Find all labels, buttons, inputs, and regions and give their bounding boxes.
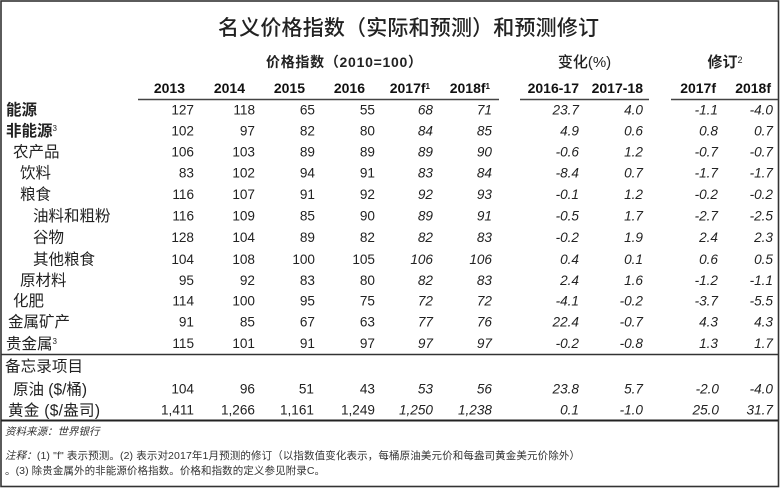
row: non-energy: 85 bbox=[477, 124, 492, 138]
row: crude oil: 原油 ($/桶) bbox=[13, 380, 87, 398]
row: gold: 0.1 bbox=[560, 402, 579, 418]
row: grains: 1.9 bbox=[624, 230, 643, 245]
row: food: 107 bbox=[232, 187, 255, 202]
row: metals and minerals: 金属矿产 bbox=[8, 313, 70, 331]
row: raw materials: 83 bbox=[477, 273, 492, 288]
row: precious metals: 1.7 bbox=[754, 336, 773, 351]
row: energy: 68 bbox=[418, 102, 433, 118]
row: oils and meals: -2.7 bbox=[695, 208, 718, 224]
row: non-energy: 82 bbox=[300, 124, 315, 138]
row: energy: -1.1 bbox=[695, 102, 718, 118]
row: other food: 106 bbox=[469, 252, 492, 267]
row: crude oil: 53 bbox=[418, 382, 433, 396]
row: other food: 104 bbox=[171, 252, 194, 267]
column headers: 2017f bbox=[680, 80, 716, 96]
memo divider bbox=[1, 354, 778, 356]
row: food: 116 bbox=[172, 187, 194, 202]
row: fertilizers: -4.1 bbox=[556, 294, 579, 308]
row: grains: 83 bbox=[477, 230, 492, 245]
row: oils and meals bbox=[33, 207, 773, 225]
row: food: 92 bbox=[418, 187, 433, 202]
row: metals and minerals: 67 bbox=[300, 314, 315, 330]
row: raw materials: 80 bbox=[360, 273, 375, 288]
row: beverages: 83 bbox=[418, 166, 433, 180]
row: raw materials bbox=[20, 272, 773, 290]
row: metals and minerals: 76 bbox=[477, 314, 492, 330]
row: fertilizers: 化肥 bbox=[13, 292, 44, 310]
row: metals and minerals: 91 bbox=[179, 314, 194, 330]
row: metals and minerals: 85 bbox=[240, 314, 255, 330]
row: precious metals: 1.3 bbox=[699, 336, 718, 351]
row: beverages: 84 bbox=[477, 166, 492, 180]
row: non-energy: 80 bbox=[360, 124, 375, 138]
row: oils and meals: 85 bbox=[300, 208, 315, 224]
row: energy: 118 bbox=[233, 102, 255, 118]
row: other food: 106 bbox=[410, 252, 433, 267]
row: food: 93 bbox=[477, 187, 492, 202]
row: gold: 1,250 bbox=[399, 402, 433, 418]
notes: 注释：(1) "f" 表示预测。(2) 表示对2017年1月预测的修订（以指数值变化表示，每桶原油美元价和每盎司黄金美元价除外） bbox=[5, 449, 580, 462]
row: oils and meals: 91 bbox=[477, 208, 492, 224]
header group: revisions: 2 bbox=[738, 55, 743, 65]
row: agriculture: -0.7 bbox=[695, 144, 718, 160]
row: other food: 100 bbox=[292, 252, 315, 267]
row: beverages: -8.4 bbox=[556, 166, 579, 180]
row: precious metals: 97 bbox=[360, 336, 375, 351]
row: other food: 0.6 bbox=[699, 252, 718, 267]
row: grains: 89 bbox=[300, 230, 315, 245]
row: non-energy: 0.7 bbox=[754, 124, 773, 138]
row: gold: 1,411 bbox=[161, 402, 194, 418]
row: grains bbox=[33, 228, 773, 246]
row: oils and meals: 89 bbox=[418, 208, 433, 224]
row: fertilizers: 95 bbox=[300, 294, 315, 308]
column headers: 2016 bbox=[334, 80, 365, 96]
row: non-energy: 97 bbox=[240, 124, 255, 138]
column headers: 2017-18 bbox=[592, 80, 643, 96]
row: crude oil: 51 bbox=[299, 382, 314, 396]
row: crude oil: 5.7 bbox=[624, 382, 643, 396]
row: non-energy: 0.6 bbox=[624, 124, 643, 138]
row: raw materials: 2.4 bbox=[559, 273, 579, 288]
row: gold: 31.7 bbox=[747, 402, 773, 418]
row: fertilizers: 75 bbox=[360, 294, 375, 308]
row: other food: 0.4 bbox=[560, 252, 579, 267]
row: raw materials: 82 bbox=[418, 273, 433, 288]
row: grains: 82 bbox=[360, 230, 375, 245]
row: gold: 1,266 bbox=[221, 402, 255, 418]
row: other food: 0.5 bbox=[754, 252, 773, 267]
row: other food bbox=[33, 250, 773, 268]
row: oils and meals: 116 bbox=[172, 208, 194, 224]
row: metals and minerals: 77 bbox=[418, 314, 433, 330]
row: energy: 127 bbox=[171, 102, 194, 118]
row: metals and minerals: -0.7 bbox=[620, 314, 643, 330]
bottom rule bbox=[1, 420, 778, 422]
row: agriculture bbox=[13, 143, 773, 161]
row: crude oil: 43 bbox=[360, 382, 375, 396]
row: food: -0.1 bbox=[556, 187, 579, 202]
row: precious metals: -0.2 bbox=[556, 336, 579, 351]
row: fertilizers: 72 bbox=[418, 294, 433, 308]
column headers: 2018f bbox=[735, 80, 771, 96]
header group: price index: 价格指数（2010=100） bbox=[266, 54, 422, 70]
row: agriculture: 89 bbox=[360, 144, 375, 160]
row: food: -0.2 bbox=[750, 187, 773, 202]
notes: 。(3) 除贵金属外的非能源价格指数。价格和指数的定义参见附录C。 bbox=[5, 464, 325, 477]
row: grains: 104 bbox=[232, 230, 255, 245]
row: energy: 4.0 bbox=[624, 102, 643, 118]
row: raw materials: 原材料 bbox=[20, 272, 67, 290]
row: oils and meals: 90 bbox=[360, 208, 375, 224]
row: crude oil: 23.8 bbox=[552, 382, 579, 396]
row: raw materials: 95 bbox=[179, 273, 194, 288]
row: metals and minerals: 22.4 bbox=[552, 314, 579, 330]
row: other food: 0.1 bbox=[624, 252, 643, 267]
row: crude oil: 104 bbox=[171, 382, 194, 396]
row: other food: 108 bbox=[232, 252, 255, 267]
row: grains: 82 bbox=[418, 230, 433, 245]
row: agriculture: 103 bbox=[232, 144, 255, 160]
row: oils and meals: 油料和粗粉 bbox=[33, 207, 111, 225]
row: crude oil: 56 bbox=[477, 382, 492, 396]
row: gold bbox=[8, 402, 773, 420]
row: energy bbox=[6, 100, 773, 119]
row: precious metals: 91 bbox=[300, 336, 315, 351]
row: other food: 其他粮食 bbox=[33, 250, 96, 268]
row: non-energy: 102 bbox=[171, 124, 194, 138]
row: beverages: 102 bbox=[232, 166, 255, 180]
row: precious metals: 3 bbox=[53, 337, 58, 346]
row: agriculture: 90 bbox=[477, 144, 492, 160]
row: grains: -0.2 bbox=[556, 230, 579, 245]
row: fertilizers: -5.5 bbox=[750, 294, 773, 308]
row: food: 92 bbox=[360, 187, 375, 202]
row: energy: 23.7 bbox=[552, 102, 579, 118]
row: raw materials: 83 bbox=[300, 273, 315, 288]
column headers bbox=[154, 80, 771, 96]
row: food: 91 bbox=[300, 187, 315, 202]
row: precious metals: 97 bbox=[418, 336, 433, 351]
row: beverages: 94 bbox=[300, 166, 315, 180]
row: food bbox=[20, 186, 773, 204]
title: 名义价格指数（实际和预测）和预测修订 bbox=[218, 17, 599, 40]
memo heading: 备忘录项目 bbox=[5, 358, 83, 376]
row: food: 粮食 bbox=[20, 186, 52, 204]
row: non-energy: 4.9 bbox=[560, 124, 579, 138]
row: oils and meals: -2.5 bbox=[750, 208, 773, 224]
header group: change: 变化(%) bbox=[558, 53, 611, 71]
row: gold: 1,249 bbox=[341, 402, 375, 418]
row: precious metals: 115 bbox=[172, 336, 194, 351]
row: agriculture: 89 bbox=[300, 144, 315, 160]
column headers: 2017f bbox=[390, 80, 426, 96]
row: food: 1.2 bbox=[624, 187, 643, 202]
column headers: 2015 bbox=[274, 80, 305, 96]
row: raw materials: 1.6 bbox=[624, 273, 643, 288]
row: grains: 2.3 bbox=[753, 230, 773, 245]
row: precious metals bbox=[6, 335, 773, 353]
row: metals and minerals: 4.3 bbox=[754, 314, 773, 330]
row: metals and minerals: 63 bbox=[360, 314, 375, 330]
row: grains: 谷物 bbox=[33, 228, 64, 246]
column headers: 1 bbox=[486, 82, 491, 91]
row: beverages: -1.7 bbox=[750, 166, 773, 180]
row: gold: 1,238 bbox=[458, 402, 492, 418]
row: gold: 25.0 bbox=[692, 402, 719, 418]
row: energy: 65 bbox=[300, 102, 315, 118]
column headers: 2016-17 bbox=[528, 80, 579, 96]
row: energy: 71 bbox=[477, 102, 492, 118]
row: metals and minerals: 4.3 bbox=[699, 314, 718, 330]
row: fertilizers: 100 bbox=[232, 294, 255, 308]
row: fertilizers: -3.7 bbox=[695, 294, 718, 308]
row: agriculture: 农产品 bbox=[13, 143, 60, 161]
row: agriculture: 1.2 bbox=[624, 144, 643, 160]
row: precious metals: 101 bbox=[232, 336, 255, 351]
row: agriculture: 89 bbox=[418, 144, 433, 160]
row: oils and meals: 109 bbox=[232, 208, 255, 224]
row: fertilizers: -0.2 bbox=[620, 294, 643, 308]
row: energy: -4.0 bbox=[750, 102, 773, 118]
row: beverages: 91 bbox=[360, 166, 375, 180]
row: fertilizers bbox=[13, 292, 773, 310]
row: raw materials: -1.2 bbox=[695, 273, 718, 288]
header group: revisions: 修订 bbox=[707, 54, 738, 71]
row: food: -0.2 bbox=[695, 187, 718, 202]
row: grains: 2.4 bbox=[698, 230, 718, 245]
row: energy: 55 bbox=[360, 102, 375, 118]
row: other food: 105 bbox=[352, 252, 375, 267]
column headers: 1 bbox=[426, 82, 431, 91]
header rules bbox=[138, 98, 778, 100]
row: non-energy: 3 bbox=[53, 124, 58, 133]
column headers: 2013 bbox=[154, 80, 185, 96]
row: crude oil: 96 bbox=[240, 382, 255, 396]
row: gold: 1,161 bbox=[280, 402, 314, 418]
row: non-energy bbox=[6, 121, 773, 140]
row: agriculture: 106 bbox=[171, 144, 194, 160]
row: raw materials: 92 bbox=[240, 273, 255, 288]
row: energy: 能源 bbox=[6, 100, 38, 119]
row: fertilizers: 72 bbox=[477, 294, 492, 308]
row: oils and meals: -0.5 bbox=[556, 208, 579, 224]
row: fertilizers: 114 bbox=[172, 294, 194, 308]
row: beverages: 83 bbox=[179, 166, 194, 180]
row: non-energy: 0.8 bbox=[699, 124, 718, 138]
row: agriculture: -0.6 bbox=[556, 144, 579, 160]
row: gold: 黄金 ($/盎司) bbox=[8, 402, 100, 420]
row: precious metals: -0.8 bbox=[620, 336, 643, 351]
row: beverages: -1.7 bbox=[695, 166, 718, 180]
row: non-energy: 非能源 bbox=[6, 123, 53, 140]
column headers: 2014 bbox=[214, 80, 245, 96]
row: non-energy: 84 bbox=[418, 124, 433, 138]
row: beverages: 饮料 bbox=[20, 164, 51, 182]
row: precious metals: 97 bbox=[477, 336, 492, 351]
row: raw materials: -1.1 bbox=[750, 273, 773, 288]
row: beverages: 0.7 bbox=[624, 166, 643, 180]
row: crude oil: -4.0 bbox=[750, 382, 773, 396]
notes bbox=[5, 449, 580, 477]
row: metals and minerals bbox=[8, 313, 773, 331]
source: 资料来源：世界银行 bbox=[5, 426, 101, 438]
row: gold: -1.0 bbox=[620, 402, 643, 418]
row: crude oil bbox=[13, 380, 773, 398]
row: beverages bbox=[20, 164, 773, 182]
row: agriculture: -0.7 bbox=[750, 144, 773, 160]
column headers: 2018f bbox=[450, 80, 486, 96]
row: grains: 128 bbox=[171, 230, 194, 245]
row: oils and meals: 1.7 bbox=[624, 208, 643, 224]
row: crude oil: -2.0 bbox=[696, 382, 719, 396]
row: precious metals: 贵金属 bbox=[6, 336, 53, 353]
